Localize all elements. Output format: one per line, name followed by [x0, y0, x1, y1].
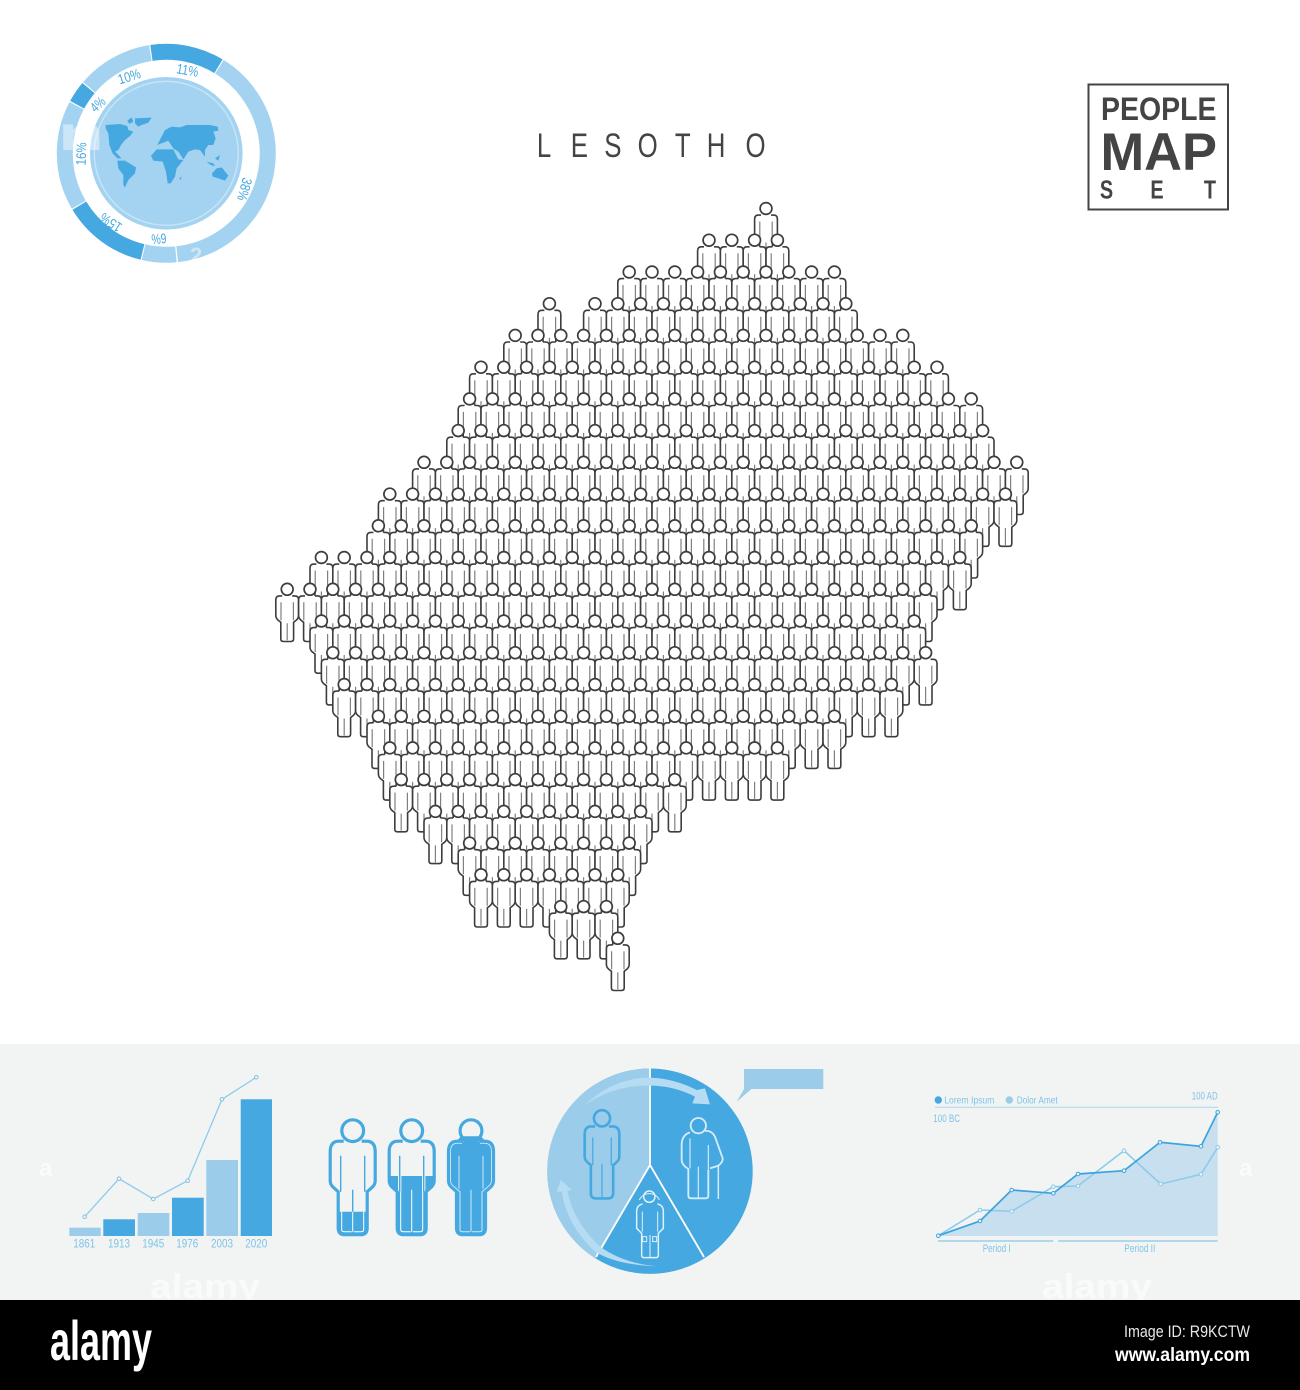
bar chart with trend line: 1913	[108, 1236, 130, 1250]
footer logo: alamy	[50, 1309, 152, 1372]
badge: people map set: MAP	[1100, 123, 1217, 182]
arrow: top curved	[585, 1078, 710, 1105]
globe ring chart	[23, 10, 309, 296]
footer website: www.alamy.com	[1114, 1345, 1250, 1366]
pie chart: age groups	[547, 1068, 753, 1274]
badge: people map set: SET	[1100, 175, 1216, 204]
title: LESOTHO	[537, 128, 766, 165]
icon: person filled half	[389, 1120, 434, 1235]
icon: adult	[585, 1110, 619, 1198]
map: Lesotho made of people icons	[276, 203, 1028, 991]
bar chart with trend line: 2003	[211, 1236, 233, 1250]
bar chart with trend line: 1945	[142, 1236, 165, 1250]
arrow: lower left curved	[557, 1180, 657, 1266]
ring percentage labels: 15%	[97, 210, 125, 236]
area line chart: Period I	[983, 1243, 1011, 1255]
area line chart	[933, 1090, 1219, 1255]
ring watermark marks	[58, 108, 202, 268]
bar chart with trend line: 1976	[176, 1236, 199, 1250]
callout	[737, 1069, 823, 1102]
badge: people map set	[1088, 84, 1228, 210]
ring percentage labels: 38%	[234, 176, 256, 202]
legend	[935, 1094, 1058, 1106]
legend: Dolor Amet	[1017, 1094, 1058, 1106]
ring percentage labels: 11%	[175, 60, 200, 80]
watermark marks: a	[39, 1155, 53, 1182]
badge: people map set: PEOPLE	[1101, 91, 1216, 127]
ring percentage labels: 4%	[87, 93, 109, 115]
icon: child with headphones	[637, 1191, 663, 1258]
watermark marks: alamy	[150, 1268, 260, 1306]
watermark marks: a	[1239, 1155, 1253, 1182]
footer bar	[0, 1300, 1300, 1390]
ring watermark marks: n	[58, 108, 104, 161]
area line chart: 100 BC	[933, 1113, 960, 1125]
icon: person filled low	[330, 1120, 375, 1235]
ring percentage labels: 16%	[73, 142, 89, 166]
area line chart: Period II	[1124, 1243, 1155, 1255]
ring percentage labels	[73, 60, 256, 248]
icon: world map	[106, 117, 228, 187]
bar chart with trend line	[69, 1076, 272, 1250]
watermark marks: alamy	[1042, 1268, 1152, 1306]
ring percentage labels: 6%	[151, 230, 167, 248]
ring watermark marks: 2	[190, 243, 202, 268]
bar chart with trend line: 2020	[245, 1236, 268, 1250]
watermark marks	[39, 1155, 1253, 1306]
icon: person filled full	[448, 1120, 494, 1235]
bar chart with trend line: 1861	[73, 1236, 96, 1250]
footer image id: Image ID: R9KCTW	[1124, 1322, 1250, 1341]
bottom band background	[0, 1044, 1300, 1300]
ring percentage labels: 10%	[116, 65, 143, 87]
legend: Lorem Ipsum	[944, 1094, 994, 1106]
icon: elder with cane	[682, 1118, 723, 1199]
area line chart: 100 AD	[1192, 1090, 1218, 1102]
